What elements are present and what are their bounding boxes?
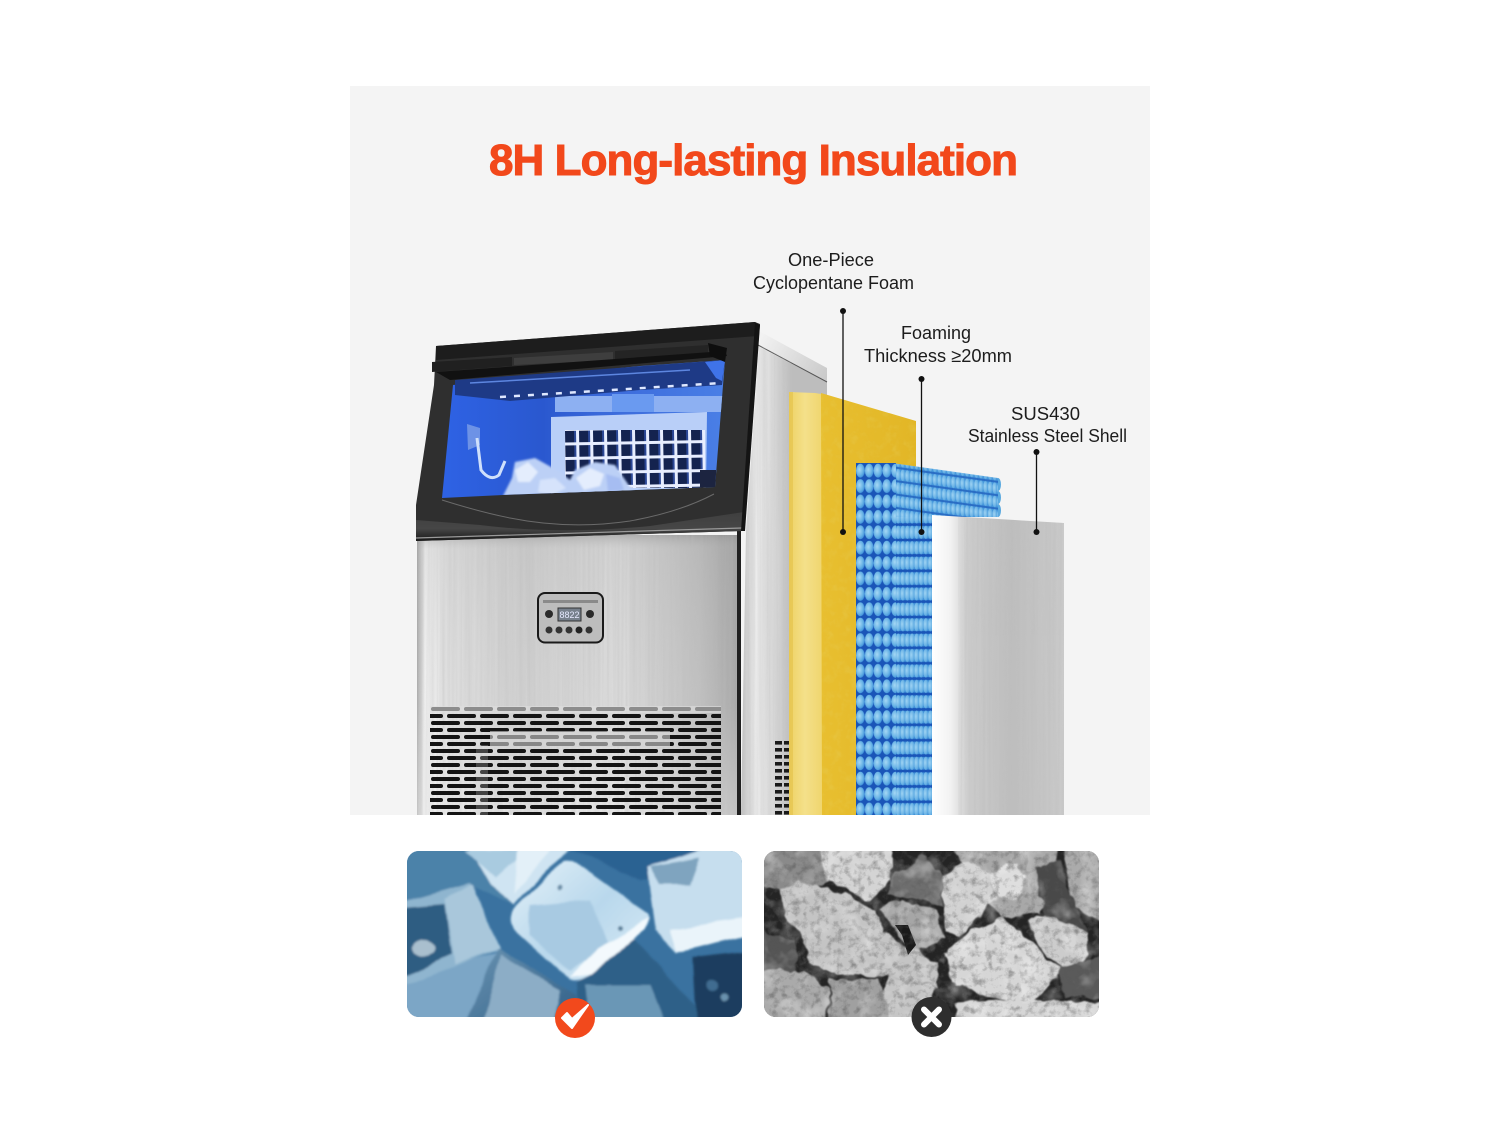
insulation layers [789,392,1064,815]
ice tray frame [551,412,707,495]
label: foaming thickness: Thickness ≥20mm [864,345,1012,366]
label: SUS430 stainless steel shell [968,403,1127,446]
front lid strip [432,343,727,380]
layer: stainless steel shell [932,515,1064,815]
label: foaming thickness [864,322,1012,366]
black top housing [416,322,760,541]
ice grid cells [565,430,705,488]
label: SUS430 stainless steel shell: Stainless Steel Shell [968,425,1127,446]
leader line: thickness [918,376,924,535]
hanging scoop hook [467,424,505,478]
layer: cyclopentane foam [789,392,916,815]
ice machine [416,322,827,815]
ice scoop lid [455,360,725,401]
label: foaming thickness: Foaming [901,322,971,343]
panel: product background [350,86,1150,815]
window interior [442,360,725,498]
photo: cloudy crushed ice [764,851,1099,1017]
front vent grille [430,706,721,815]
label: one-piece cyclopentane foam [753,249,914,293]
badge: check mark [555,998,595,1038]
title: 8H Long-lasting Insulation [489,136,1018,185]
label: SUS430 stainless steel shell: SUS430 [1011,403,1080,424]
label: one-piece cyclopentane foam: Cyclopentane Foam [753,272,914,293]
crushed ice pile [503,458,640,496]
leader line: steel shell [1034,449,1040,535]
leader line: foam [840,308,846,535]
lower window bezel curve [442,494,714,525]
layer: blue foaming balls [856,463,1001,815]
control panel: 8822 [559,610,580,620]
machine front panel [417,531,741,815]
control panel [538,593,603,642]
label: one-piece cyclopentane foam: One-Piece [788,249,874,270]
badge: cross mark [912,997,952,1037]
machine side panel [741,331,827,815]
photo: clear ice cubes [407,851,742,1017]
